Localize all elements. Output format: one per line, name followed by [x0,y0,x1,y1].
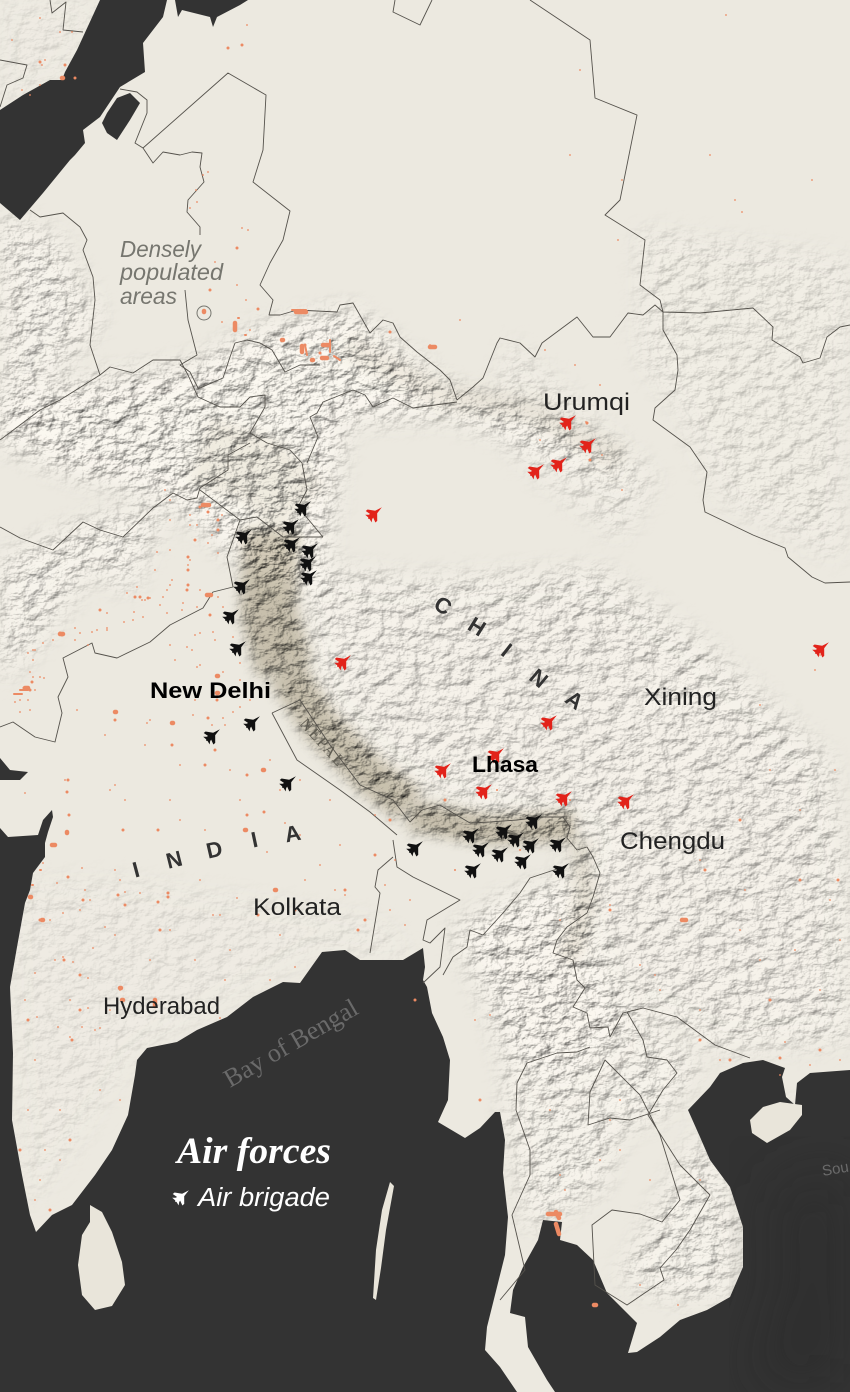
country label: China: A [561,685,588,715]
legend: Air forces: Air forces [175,1131,331,1172]
country label: China [430,591,588,715]
land: Andaman Islands [373,1182,394,1300]
sea: Gulf of Thailand and South China Sea [510,1060,850,1392]
city labels: Kolkata [253,894,341,921]
callout circle [197,306,211,320]
capital labels [150,678,539,777]
land: Sri Lanka [78,1205,125,1310]
country label: India: N [163,846,185,874]
sea: Aral [102,93,140,140]
sea label: Bay of Bengal: Bay of Bengal [218,993,363,1093]
sea label: South China Sea: Sou [821,1159,850,1180]
land: Hainan [750,1102,802,1143]
red jets: China air brigades [332,409,834,812]
legend note: densely populated areas [119,236,224,309]
city labels: Chengdu [620,828,725,855]
country label: India: I [249,827,260,853]
city labels: Xining [644,684,717,711]
country label: India: D [204,836,225,864]
legend: Air forces [170,1131,331,1212]
city labels [103,389,725,1020]
country label: China: C [430,591,456,621]
city labels: Urumqi [543,389,630,416]
country label: India: I [130,857,142,883]
country label: China: I [497,638,517,662]
country label: India: A [282,820,303,847]
legend: Air forces: Air brigade [196,1184,330,1212]
sea: Arabian Sea and Bay of Bengal [0,810,517,1392]
capital labels: New Delhi [150,678,271,703]
country label: China: N [525,664,553,693]
legend note: densely populated areas: areas [120,283,177,309]
icon: air brigade jet [170,1184,194,1208]
capital labels: Lhasa [472,752,539,777]
sea: Caspian [0,0,167,220]
legend note: densely populated areas: populated [119,259,224,285]
legend note: densely populated areas: Densely [120,236,202,262]
country label: Nepal: NEPAL [296,715,349,771]
sea floor shading [740,1160,850,1392]
country label: India [130,820,303,883]
sea: Gulf of Kutch [0,758,28,780]
country label: China: H [464,612,490,641]
city labels: Hyderabad [103,993,220,1020]
black jets: India air brigades [201,495,574,881]
sea: Aral north [175,0,248,27]
